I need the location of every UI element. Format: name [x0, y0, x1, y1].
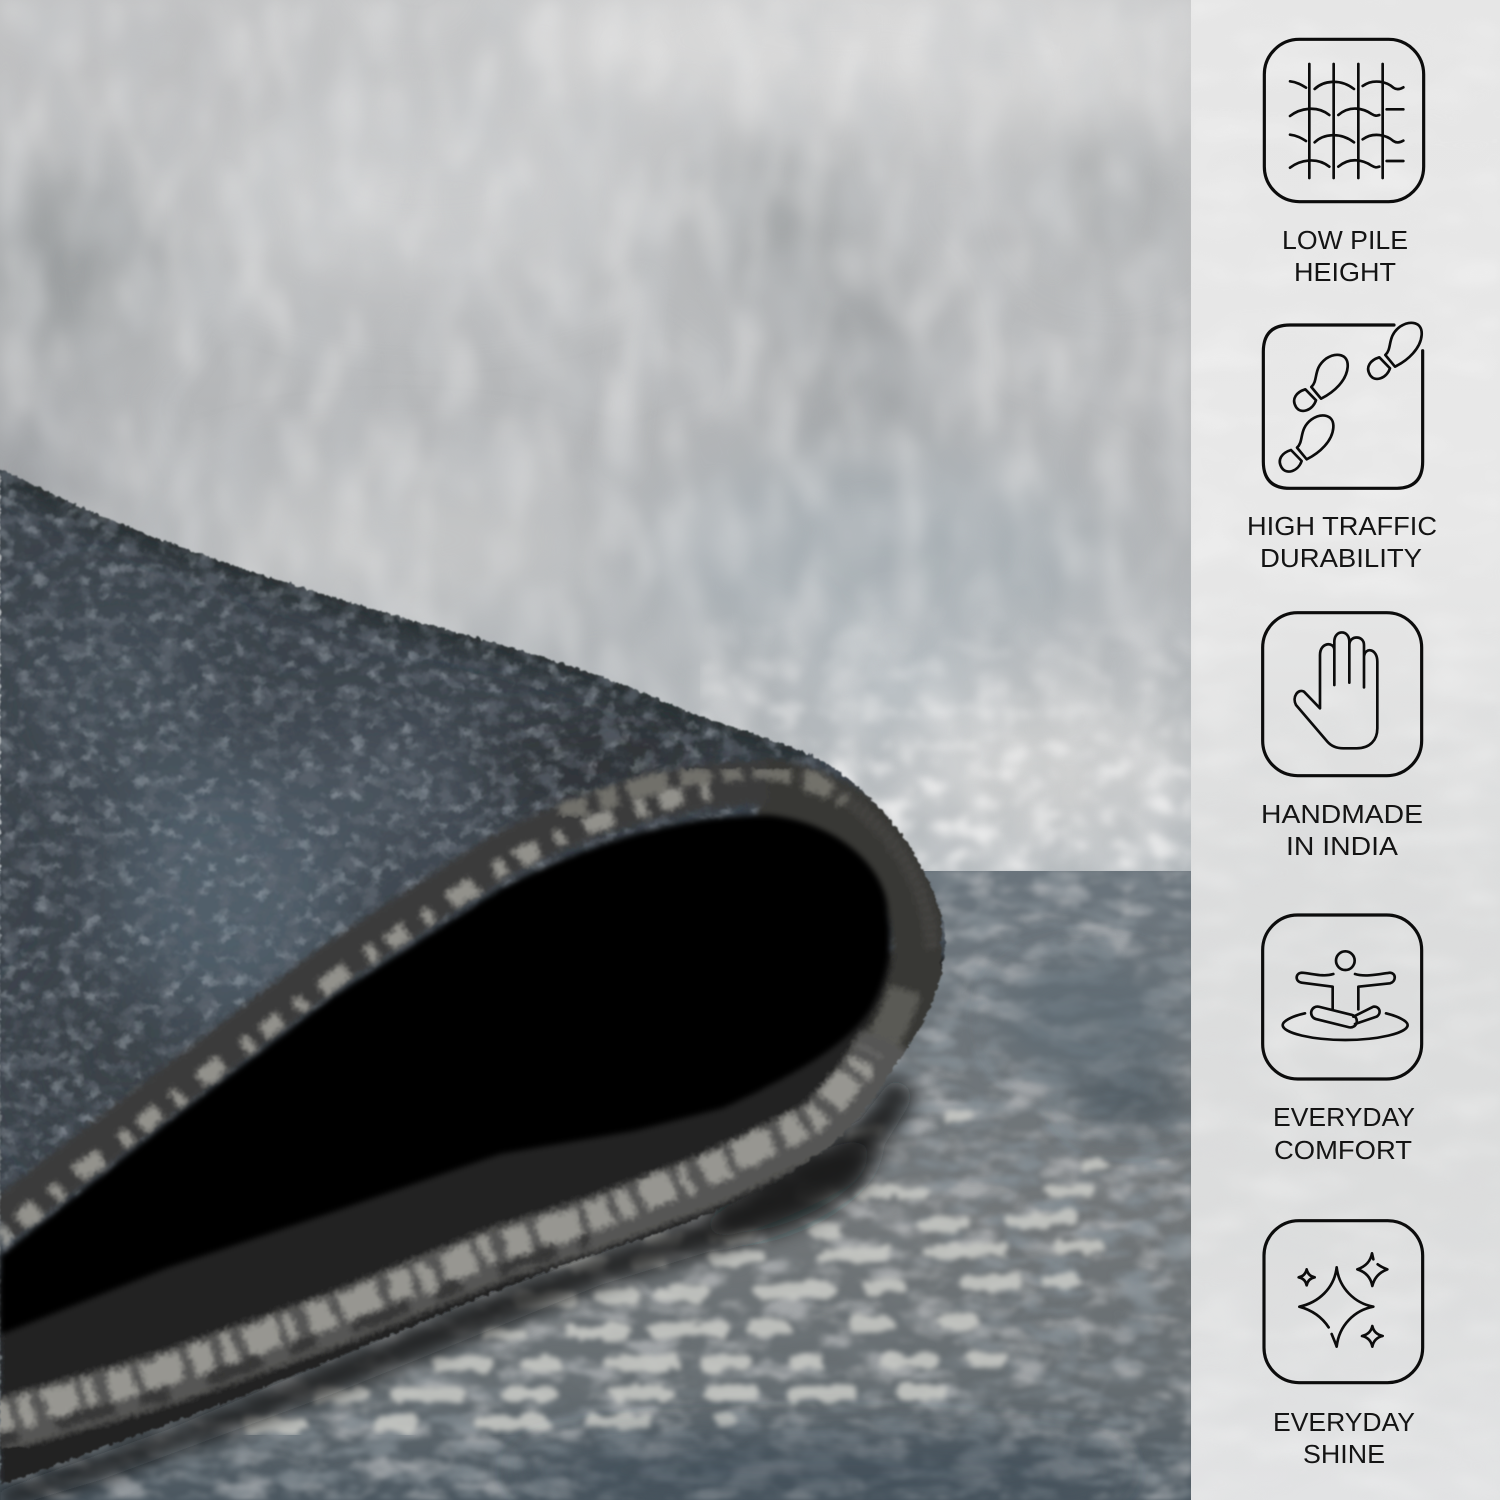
rug: curled fringe edge	[760, 775, 932, 1120]
icon: seated meditation figure	[1263, 915, 1422, 1079]
floor: pale woven flecks	[250, 1105, 1130, 1425]
icon: sparkles	[1264, 1221, 1423, 1383]
side panel	[1191, 0, 1500, 1500]
label: LOW PILE	[1282, 225, 1408, 255]
rug shadow on floor	[0, 1075, 915, 1500]
label: COMFORT	[1274, 1135, 1412, 1165]
rug: black inner cavity	[0, 815, 890, 1335]
feature: handmade in india	[1261, 613, 1423, 861]
feature: everyday shine	[1264, 1221, 1423, 1469]
label: DURABILITY	[1260, 543, 1422, 573]
label: IN INDIA	[1286, 831, 1399, 861]
icon: footprints	[1263, 323, 1423, 488]
floor: mottled pale patches near seam	[702, 632, 1191, 871]
feature: low pile height	[1264, 39, 1424, 287]
label: SHINE	[1303, 1439, 1385, 1469]
rug: underside layer	[0, 950, 960, 1500]
icon: woven pile grid	[1264, 39, 1424, 202]
floor: dark lower area	[0, 871, 1192, 1500]
floor: bottom mottling	[520, 960, 1190, 1500]
floor: light upper area	[0, 0, 1210, 876]
label: HANDMADE	[1261, 799, 1423, 829]
rug: upper stitched binding	[0, 770, 845, 1238]
rug: rolled roll with cavity and edge bands	[0, 460, 960, 1500]
feature: high traffic durability	[1247, 323, 1437, 573]
label: EVERYDAY	[1273, 1407, 1415, 1437]
floor: pale vertical streak	[620, 280, 640, 470]
rug: lower edge band	[0, 1040, 885, 1444]
label: HEIGHT	[1294, 257, 1396, 287]
label: EVERYDAY	[1273, 1102, 1415, 1132]
icon: open hand	[1263, 613, 1422, 776]
label: HIGH TRAFFIC	[1247, 511, 1437, 541]
feature: everyday comfort	[1263, 915, 1422, 1165]
